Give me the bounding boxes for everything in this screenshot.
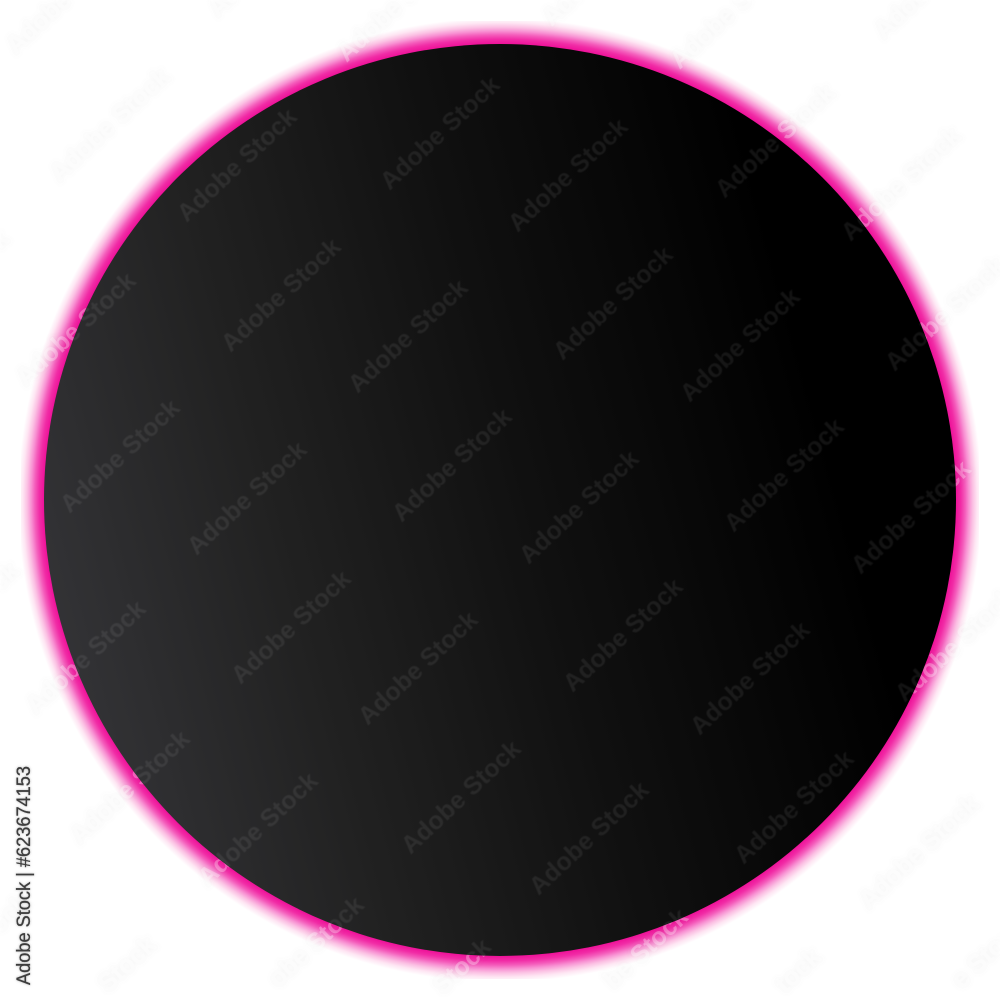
watermark pattern on the disc: Adobe Stock [216, 233, 346, 357]
watermark pattern on the disc: Adobe Stock [343, 274, 473, 398]
watermark pattern outside the disc: Adobe Stock [11, 267, 141, 391]
watermark pattern on the disc: Adobe Stock [503, 113, 633, 237]
watermark pattern on the disc: Adobe Stock [226, 565, 356, 689]
watermark pattern outside the disc: obe Stock [263, 891, 370, 993]
watermark pattern on the disc: Adobe Stock [729, 745, 859, 869]
watermark pattern outside the disc: Adobe Stock [65, 725, 195, 849]
watermark pattern on the disc: Adobe Stock [548, 241, 678, 365]
watermark pattern outside the disc: Adobe Stock [729, 745, 859, 869]
watermark pattern outside the disc: Adobe Stock [854, 790, 984, 914]
watermark pattern on the disc: Adobe Stock [182, 436, 312, 560]
watermark pattern outside the disc: Stock [428, 933, 497, 1000]
watermark pattern on the disc: Adobe Stock [193, 767, 323, 891]
watermark pattern on the disc: Adobe Stock [55, 394, 185, 518]
watermark pattern on the disc: Adobe Stock [524, 776, 654, 900]
watermark pattern outside the disc: Adobe Stock [846, 455, 976, 579]
watermark pattern on the disc: Adobe Stock [719, 413, 849, 537]
watermark pattern on the disc: Adobe Stock [710, 79, 840, 203]
watermark pattern on the disc: Adobe Stock [45, 63, 175, 187]
watermark pattern outside the disc: Adobe Stock [45, 63, 175, 187]
watermark pattern outside the disc: Stock [93, 931, 162, 998]
watermark pattern outside the disc: Adobe Stock [836, 122, 966, 246]
watermark pattern on the disc: Adobe Stock [836, 122, 966, 246]
watermark pattern on the disc [64, 78, 955, 955]
watermark pattern on the disc: obe Stock [263, 891, 370, 993]
watermark pattern on the disc: Stock [428, 933, 497, 1000]
watermark pattern on the disc: Adobe Stock [65, 725, 195, 849]
watermark pattern on the disc: Adobe Stock [172, 103, 302, 227]
watermark pattern outside the disc: be Stock [598, 903, 694, 994]
watermark pattern on the disc: Adobe Stock [21, 595, 151, 719]
watermark pattern outside the disc: Adobe Stock [193, 767, 323, 891]
watermark pattern outside the disc: Adobe Stock [21, 595, 151, 719]
watermark pattern on the disc: Adobe Stock [846, 455, 976, 579]
watermark pattern on the disc: Adobe Stock [396, 735, 526, 859]
watermark pattern on the disc: Adobe Stock [675, 283, 805, 407]
watermark pattern on the disc: Adobe Stock [375, 71, 505, 195]
stock id label: Adobe Stock | #623674153 [14, 766, 35, 985]
watermark pattern on the disc: Adobe Stock [387, 403, 517, 527]
watermark pattern on the disc: Adobe Stock [353, 606, 483, 730]
watermark pattern on the disc: be Stock [598, 903, 694, 994]
watermark pattern on the disc: Adobe Stock [685, 616, 815, 740]
watermark pattern on the disc: Adobe Stock [514, 445, 644, 569]
watermark pattern outside the disc: tock [770, 943, 827, 998]
watermark pattern on the disc: Adobe Stock [558, 573, 688, 697]
watermark pattern on the disc: Adobe Stock [11, 267, 141, 391]
watermark pattern outside the disc: Adobe Stock [710, 79, 840, 203]
